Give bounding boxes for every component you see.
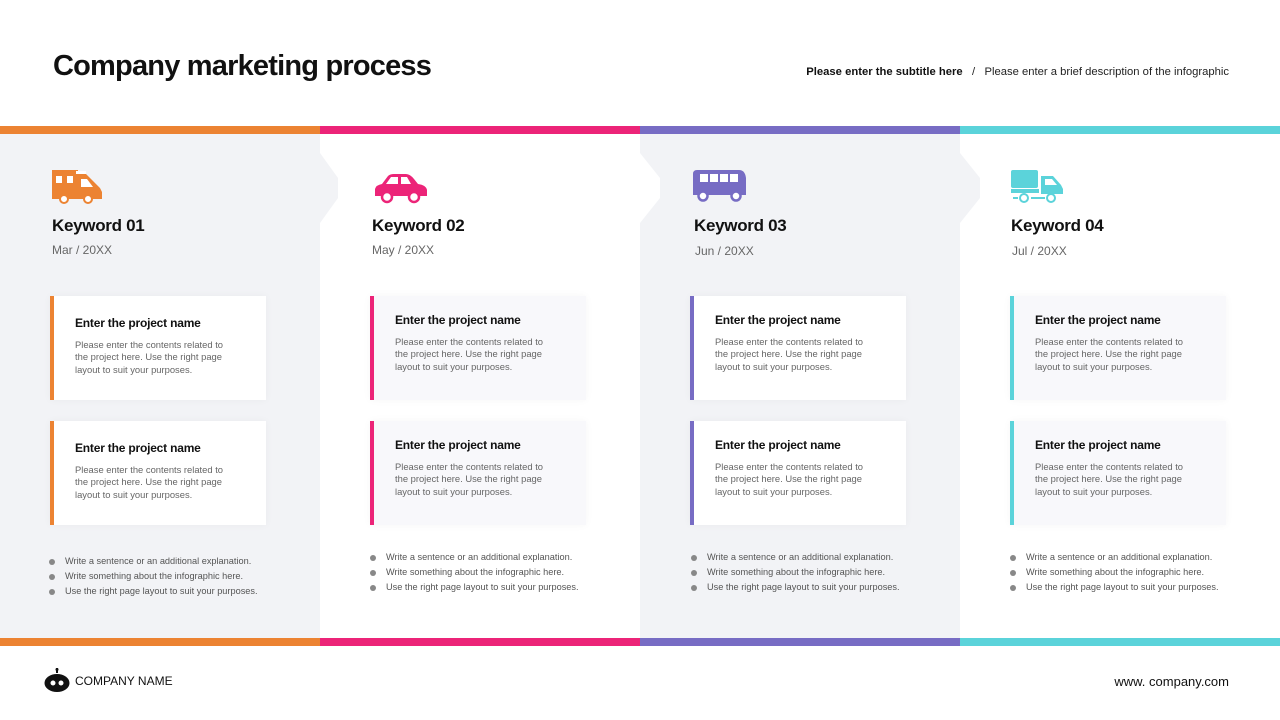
- card 1: Please enter the contents related to: [1035, 336, 1183, 347]
- card 1: Enter the project name: [715, 313, 841, 327]
- panel: keyword 03: [690, 170, 906, 592]
- footer url: www. company.com: [1114, 674, 1229, 689]
- card 1: [690, 296, 906, 400]
- panel: keyword 03: Keyword 03: [694, 216, 786, 235]
- card 2: the project here. Use the right page: [395, 473, 542, 484]
- bullets: Use the right page layout to suit your purposes.: [1026, 582, 1219, 592]
- panel: keyword 01: [49, 170, 266, 596]
- card 2: layout to suit your purposes.: [1035, 486, 1152, 497]
- card 1: the project here. Use the right page: [75, 351, 222, 362]
- bullets: Write a sentence or an additional explanation.: [1026, 552, 1212, 562]
- card 1: layout to suit your purposes.: [395, 361, 512, 372]
- footer logo: [44, 668, 173, 692]
- bullets: Write something about the infographic here.: [386, 567, 564, 577]
- icon: truck: [1011, 170, 1063, 203]
- card 1: [1010, 296, 1226, 400]
- title: Company marketing process: [53, 50, 431, 82]
- card 2: the project here. Use the right page: [75, 476, 222, 487]
- card 2: [370, 421, 586, 525]
- top color bars: [0, 126, 1280, 134]
- card 2: Enter the project name: [395, 438, 521, 452]
- card 1: Enter the project name: [75, 316, 201, 330]
- card 1: layout to suit your purposes.: [715, 361, 832, 372]
- bullets: Write a sentence or an additional explanation.: [65, 556, 251, 566]
- card 1: the project here. Use the right page: [1035, 348, 1182, 359]
- card 1: the project here. Use the right page: [715, 348, 862, 359]
- card 2: Please enter the contents related to: [715, 461, 863, 472]
- card 2: Please enter the contents related to: [75, 464, 223, 475]
- bullets: Write a sentence or an additional explanation.: [707, 552, 893, 562]
- card 2: [50, 421, 266, 525]
- card 1: the project here. Use the right page: [395, 348, 542, 359]
- panel: keyword 04: Keyword 04: [1011, 216, 1103, 235]
- bullets: Use the right page layout to suit your purposes.: [65, 586, 258, 596]
- card 1: Please enter the contents related to: [395, 336, 543, 347]
- card 2: layout to suit your purposes.: [75, 489, 192, 500]
- icon: robot: [44, 668, 70, 692]
- bullets: [49, 556, 258, 596]
- card 1: Please enter the contents related to: [715, 336, 863, 347]
- bullets: Write something about the infographic here.: [1026, 567, 1204, 577]
- icon: bus: [693, 170, 746, 202]
- bottom color bars: [0, 638, 1280, 646]
- bullets: Write a sentence or an additional explanation.: [386, 552, 572, 562]
- card 1: Enter the project name: [1035, 313, 1161, 327]
- bullets: [370, 552, 579, 592]
- card 1: [50, 296, 266, 400]
- card 1: Please enter the contents related to: [75, 339, 223, 350]
- card 2: the project here. Use the right page: [1035, 473, 1182, 484]
- panel: keyword 02: Keyword 02: [372, 216, 464, 235]
- bullets: Use the right page layout to suit your purposes.: [386, 582, 579, 592]
- card 2: Please enter the contents related to: [1035, 461, 1183, 472]
- icon: camper van: [52, 170, 102, 204]
- card 2: Please enter the contents related to: [395, 461, 543, 472]
- card 1: layout to suit your purposes.: [75, 364, 192, 375]
- panel: keyword 04: Jul / 20XX: [1012, 244, 1067, 258]
- card 2: Enter the project name: [75, 441, 201, 455]
- bullets: [1010, 552, 1219, 592]
- panel: keyword 04: [1010, 170, 1219, 592]
- card 2: [1010, 421, 1226, 525]
- icon: car: [375, 174, 427, 204]
- panel: keyword 02: May / 20XX: [372, 243, 434, 257]
- subtitle: Please enter the subtitle here / Please enter a brief description of the infographic: [806, 66, 1229, 78]
- bullets: [691, 552, 900, 592]
- card 1: Enter the project name: [395, 313, 521, 327]
- card 2: layout to suit your purposes.: [395, 486, 512, 497]
- panel: keyword 01: Mar / 20XX: [52, 243, 112, 257]
- card 2: Enter the project name: [1035, 438, 1161, 452]
- card 2: Enter the project name: [715, 438, 841, 452]
- card 2: the project here. Use the right page: [715, 473, 862, 484]
- panel: keyword 03: Jun / 20XX: [695, 244, 754, 258]
- panel: keyword 02: [370, 174, 579, 592]
- card 1: [370, 296, 586, 400]
- column backgrounds: [0, 134, 980, 638]
- card 1: layout to suit your purposes.: [1035, 361, 1152, 372]
- bullets: Use the right page layout to suit your purposes.: [707, 582, 900, 592]
- panel: keyword 01: Keyword 01: [52, 216, 144, 235]
- bullets: Write something about the infographic here.: [65, 571, 243, 581]
- bullets: Write something about the infographic here.: [707, 567, 885, 577]
- card 2: layout to suit your purposes.: [715, 486, 832, 497]
- card 2: [690, 421, 906, 525]
- footer logo: COMPANY NAME: [75, 674, 173, 688]
